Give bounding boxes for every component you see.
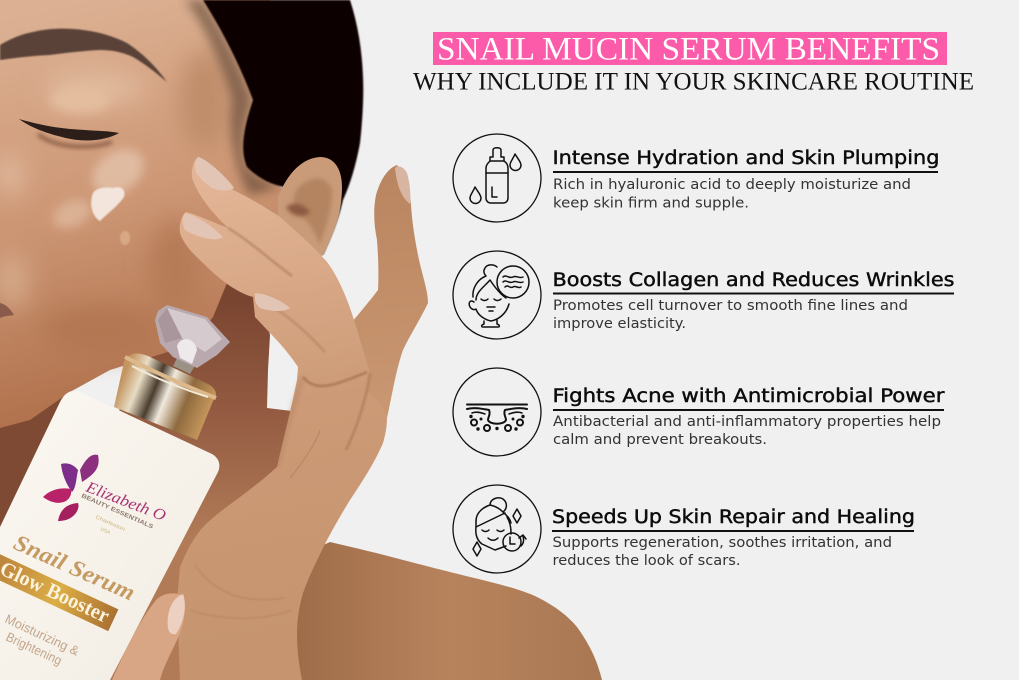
gold collar [114,354,216,440]
ear [278,157,342,256]
description: Antibacterial and anti-inflammatory properties help [553,414,941,430]
finger nails [183,157,290,311]
product bottle: USA [99,526,112,536]
product bottle: Brightening [4,629,64,668]
title: SNAIL MUCIN SERUM BENEFITS [437,32,940,68]
product bottle [0,305,230,680]
benefit 4 [453,485,915,573]
holding thumb [112,593,185,680]
description: Supports regeneration, soothes irritation, and [552,535,892,551]
serum shine [48,140,152,245]
eyelashes [19,119,119,140]
shoulder [290,542,602,680]
product bottle: Charleston [94,514,126,533]
product bottle: BEAUTY ESSENTIALS [80,493,154,531]
heading: Speeds Up Skin Repair and Healing [552,507,915,528]
description: Rich in hyaluronic acid to deeply moisturize and [553,177,911,193]
benefit 2 [453,251,954,339]
description: reduces the look of scars. [552,553,740,569]
description: calm and prevent breakouts. [553,432,767,448]
Snail Serum: Snail Serum [10,530,139,605]
heading: Boosts Collagen and Reduces Wrinkles [552,270,954,291]
bottle body [0,391,219,680]
brand text: Elizabeth O [83,478,169,525]
icon: serum bottle and drops [453,134,541,222]
heading: Fights Acne with Antimicrobial Power [552,386,945,407]
right raised finger [345,165,428,418]
eyelid [50,87,110,113]
title highlight [433,32,947,65]
subtitle: WHY INCLUDE IT IN YOUR SKINCARE ROUTINE [413,68,974,96]
Moisturizing text: Moisturizing & [3,611,82,659]
description: Promotes cell turnover to smooth fine lines and [553,298,908,314]
palm creases and finger shadows [190,228,370,618]
lips [0,303,14,318]
icon: face with wrinkle bubble [453,251,541,339]
description: improve elasticity. [553,316,686,332]
icon: towel face with clock and sparkles [453,485,541,573]
heading: Intense Hydration and Skin Plumping [552,148,940,169]
benefit 3 [453,368,945,456]
hair [185,0,363,255]
finger nail right [395,166,410,204]
benefit 1 [453,134,940,222]
eyebrow [0,29,167,82]
icon: skin pores [453,368,541,456]
face shading [0,50,230,355]
neck and jaw shadow [100,220,300,680]
photo: woman applying serum [0,0,602,680]
face [0,0,290,428]
crystal cap [155,305,230,374]
hand and wrist [177,157,387,680]
description: keep skin firm and supple. [553,196,749,212]
logo flower [43,455,99,521]
